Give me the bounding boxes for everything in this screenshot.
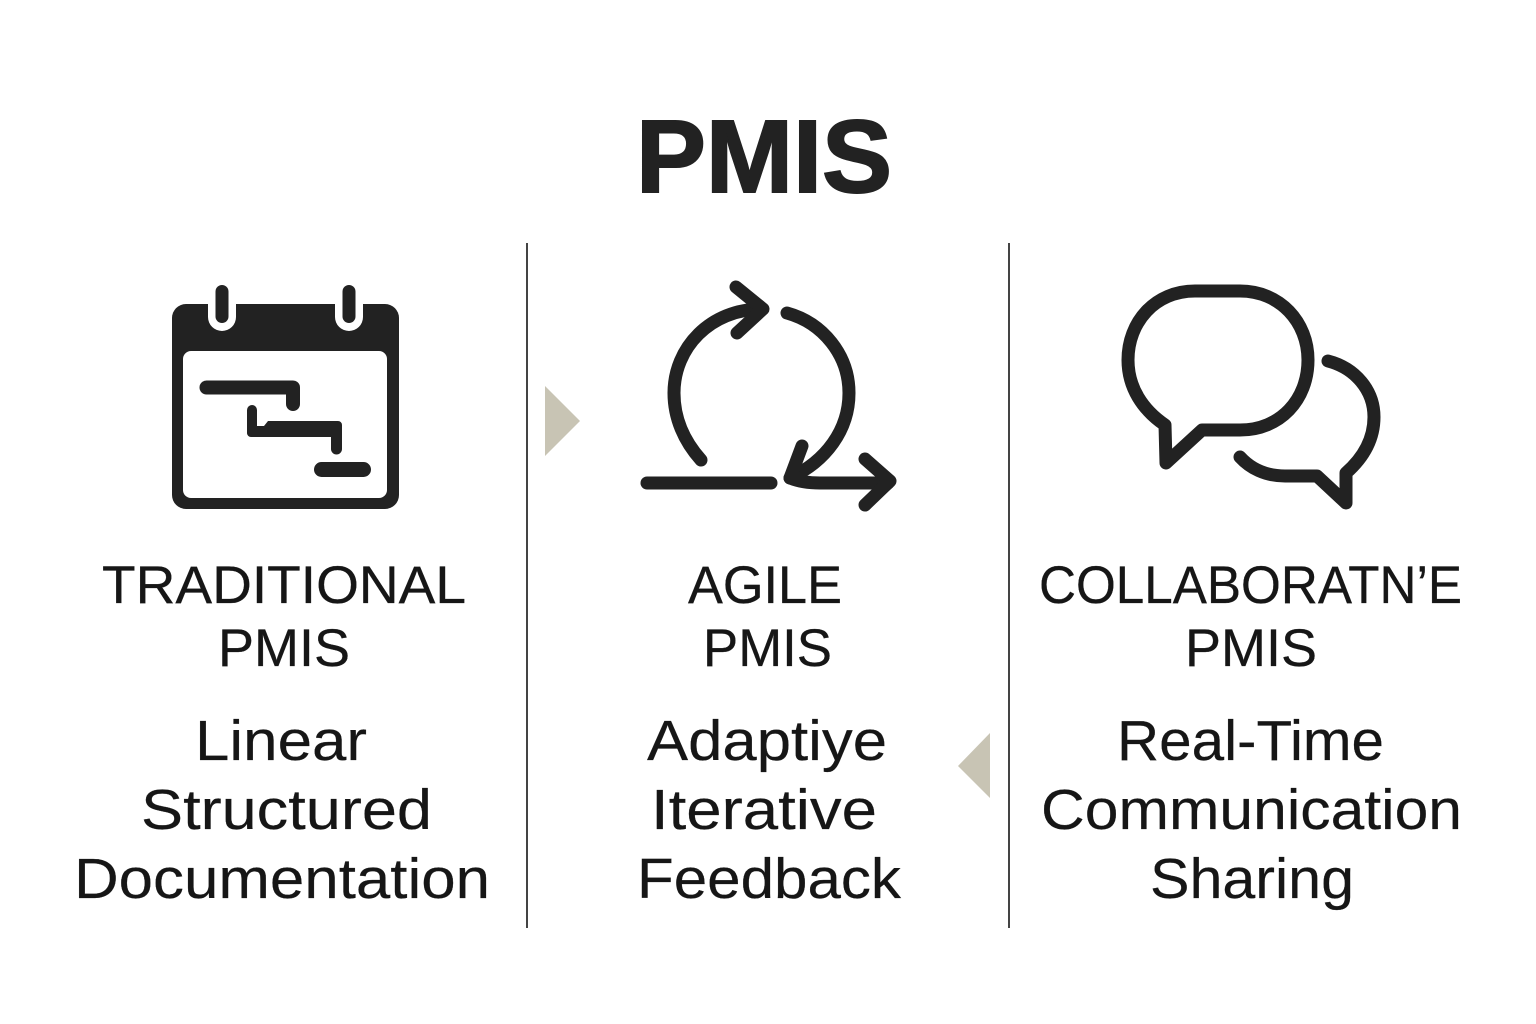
text: agile traits: Feedback: [637, 847, 902, 911]
heading: agile PMIS: [688, 556, 842, 678]
text: traditional traits: [74, 709, 490, 911]
heading: traditional PMIS: TRADITIONAL: [102, 556, 466, 615]
panel: agile PMIS: [637, 287, 902, 911]
icon: iteration loop: [647, 287, 890, 505]
text: agile traits: Adaptiye: [647, 709, 887, 773]
text: traditional traits: Documentation: [74, 847, 490, 911]
text: collaborative traits: [1041, 709, 1462, 911]
text: traditional traits: Linear: [195, 709, 367, 773]
heading: agile PMIS: PMIS: [703, 619, 832, 678]
heading: agile PMIS: AGILE: [688, 556, 842, 615]
heading: collaborative PMIS: COLLABORATN’E: [1039, 556, 1462, 615]
icon: calendar with gantt chart: [172, 280, 399, 509]
heading: collaborative PMIS: PMIS: [1185, 619, 1317, 678]
text: collaborative traits: Real-Time: [1117, 709, 1384, 773]
text: collaborative traits: Communication: [1041, 778, 1462, 842]
divider: right: [1008, 243, 1010, 928]
heading: traditional PMIS: [102, 556, 466, 678]
heading: collaborative PMIS: [1039, 556, 1462, 678]
icon: speech bubbles: [1128, 291, 1374, 503]
arrow: right-pointing triangle: [545, 386, 580, 456]
panel: traditional PMIS: [74, 280, 490, 911]
text: agile traits: [637, 709, 902, 911]
divider: left: [526, 243, 528, 928]
arrow: left-pointing triangle: [958, 733, 990, 798]
text: agile traits: Iterative: [651, 778, 877, 842]
text: collaborative traits: Sharing: [1150, 847, 1354, 911]
heading: traditional PMIS: PMIS: [218, 619, 350, 678]
title: PMIS: [636, 99, 892, 214]
panel: collaborative PMIS: [1039, 291, 1462, 911]
text: traditional traits: Structured: [141, 778, 432, 842]
